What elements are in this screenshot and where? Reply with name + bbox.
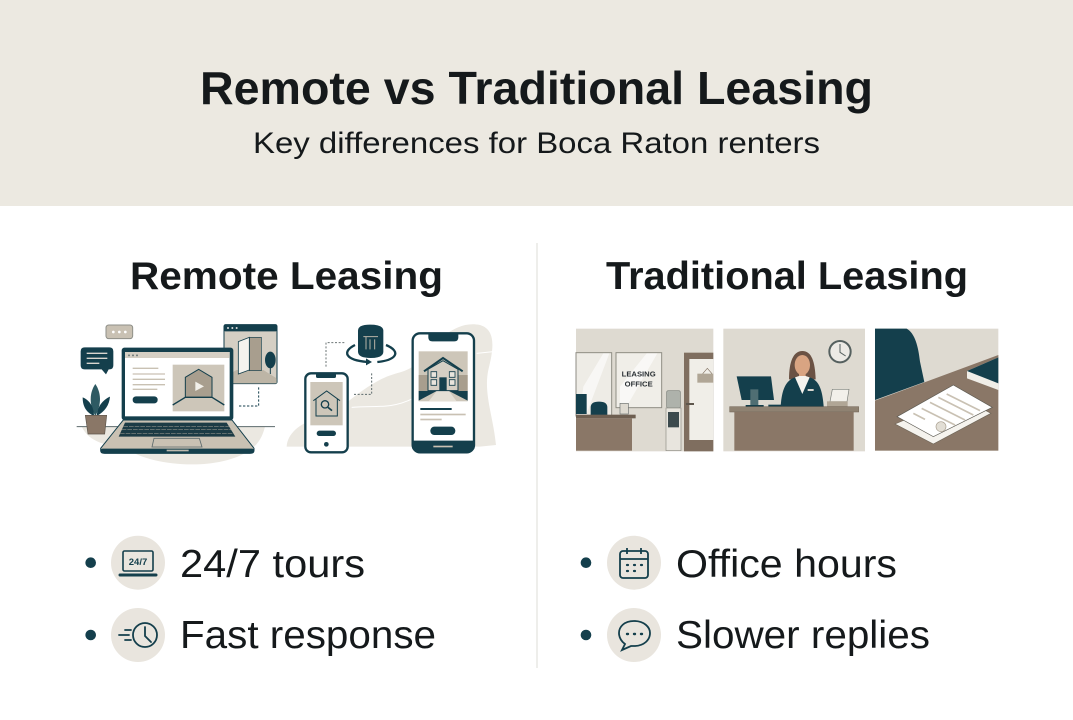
icon: potted plant <box>83 384 110 434</box>
door <box>684 353 713 451</box>
illustration: leasing office panel <box>576 329 713 451</box>
item: 24/7 tours <box>85 536 365 590</box>
icon: 3D rotate cube <box>347 325 395 365</box>
illustration: laptop virtual tour <box>77 325 277 464</box>
water cooler <box>666 391 681 451</box>
desk <box>730 407 859 451</box>
small phone <box>305 373 348 452</box>
item: 24/7 tours: 24/7 tours <box>180 543 365 586</box>
list: traditional drawbacks <box>581 536 930 662</box>
sign text: LEASING <box>622 370 656 379</box>
document tray <box>827 389 849 407</box>
heading: Remote Leasing: Remote Leasing <box>130 255 443 298</box>
title: Remote vs Traditional Leasing <box>200 62 873 114</box>
icon: chat dots bubble <box>106 325 133 339</box>
illustration: lease documents panel <box>875 329 998 451</box>
computer monitor <box>737 376 782 407</box>
icon: fast clock <box>119 623 157 647</box>
illustration: phones virtual tour <box>287 324 496 452</box>
paper stack <box>895 385 992 444</box>
item: Fast response <box>85 608 436 662</box>
icon: 24/7 laptop: 24/7 <box>129 557 147 568</box>
large phone <box>413 333 474 452</box>
icon: message bubble <box>81 347 113 374</box>
heading: Traditional Leasing: Traditional Leasing <box>606 255 968 298</box>
item: Slower replies: Slower replies <box>676 614 930 657</box>
item: Office hours <box>581 536 897 590</box>
item: Office hours: Office hours <box>676 543 897 586</box>
tour window <box>224 325 277 384</box>
illustration: receptionist panel <box>723 329 865 451</box>
wall clock <box>829 341 851 362</box>
icon: 24/7 laptop <box>120 551 156 575</box>
binder <box>967 357 998 390</box>
subtitle: Key differences for Boca Raton renters <box>253 127 820 160</box>
item: Fast response: Fast response <box>180 614 436 657</box>
icon: calendar <box>620 548 648 578</box>
laptop <box>101 348 254 453</box>
icon: speech bubble <box>619 621 650 650</box>
list: remote benefits <box>85 536 436 662</box>
header band <box>0 0 1073 206</box>
receptionist <box>781 351 824 407</box>
illustration: leasing office panel: OFFICE <box>625 379 653 388</box>
item: Slower replies <box>581 608 930 662</box>
desk <box>576 394 636 451</box>
